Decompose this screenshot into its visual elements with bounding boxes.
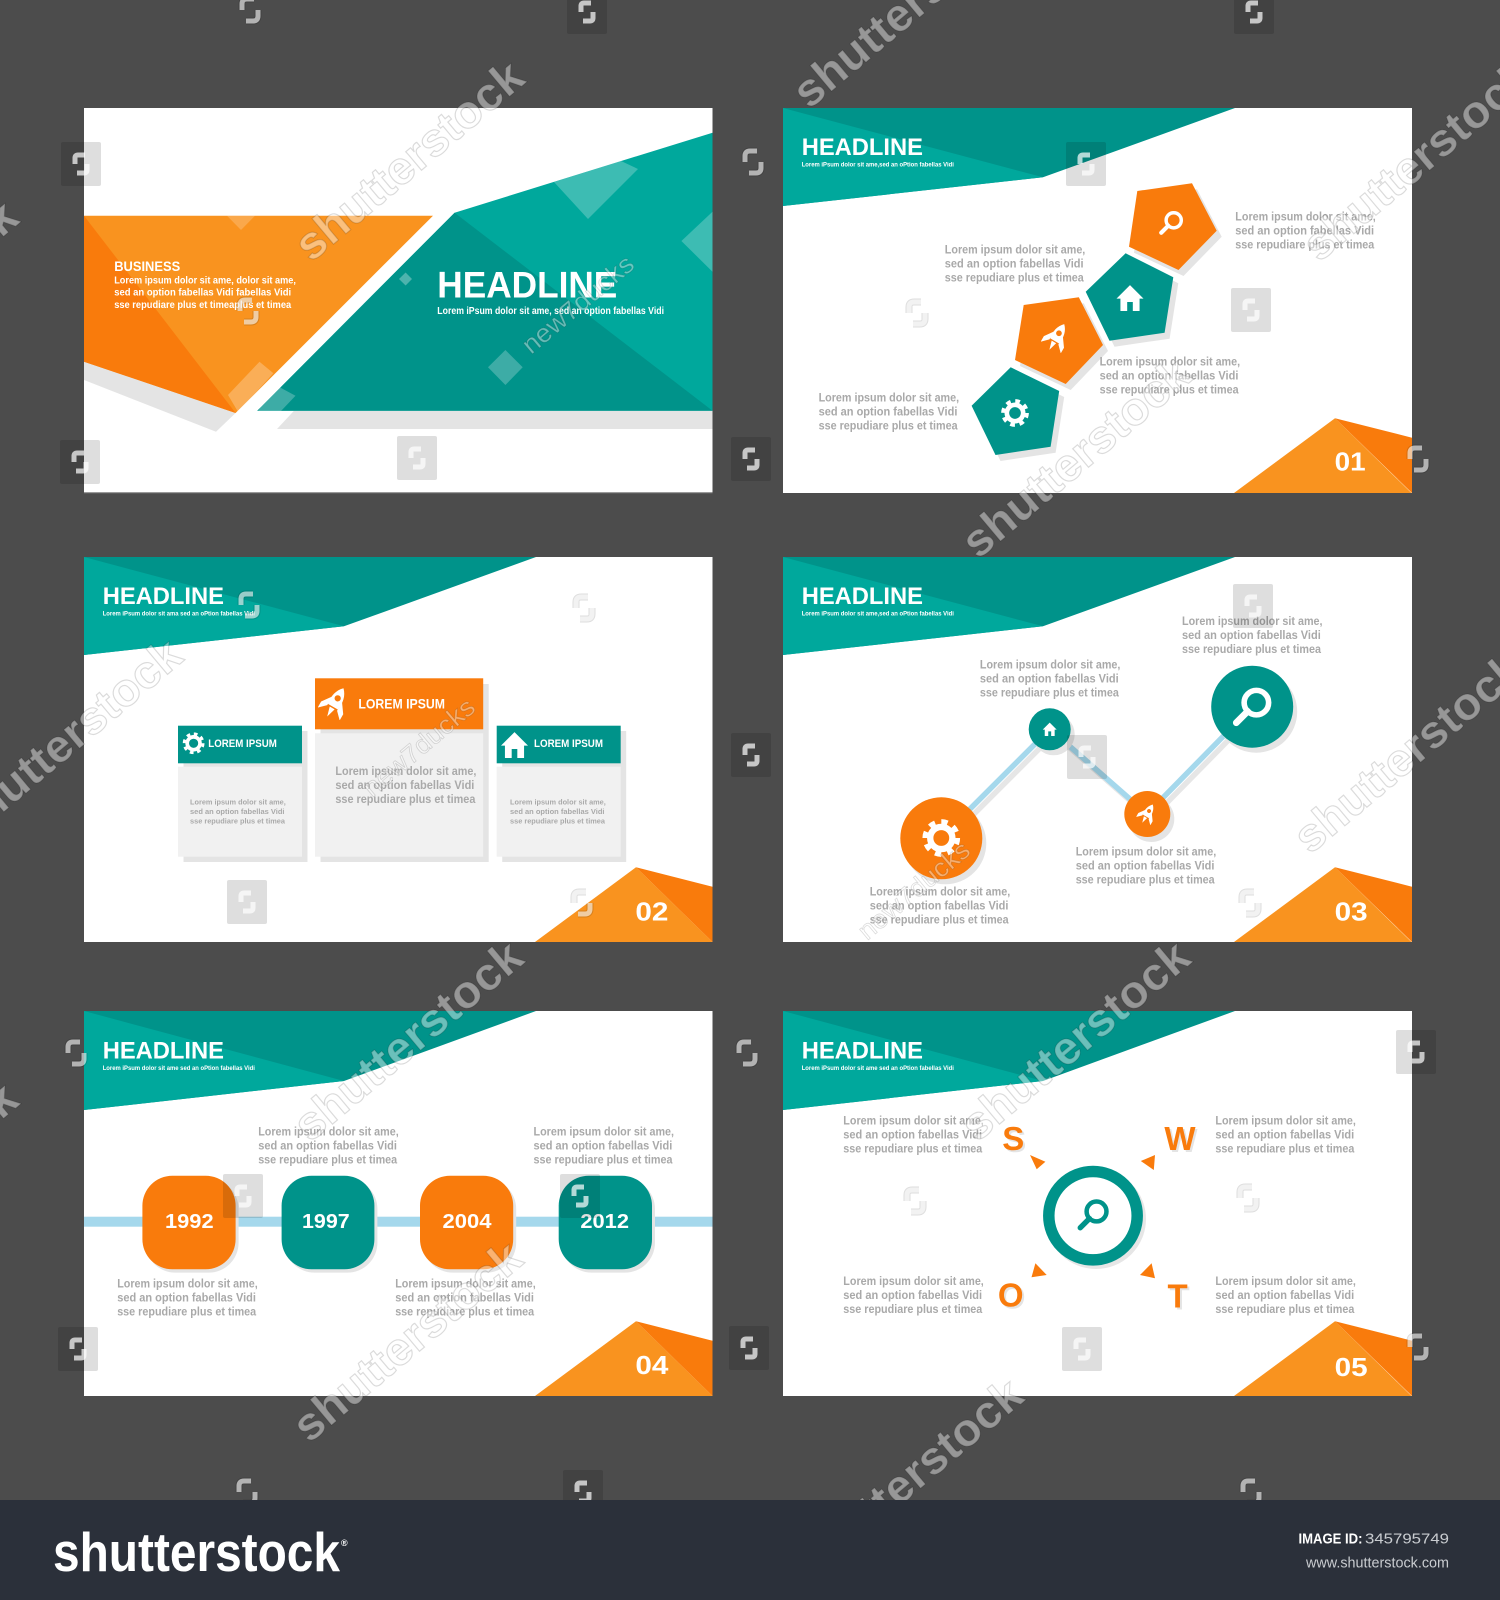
text block: 1997: sse repudiare plus et timea bbox=[258, 1155, 398, 1167]
watermark words: shutterstock bbox=[950, 929, 1200, 1151]
card: home: sse repudiare plus et timea bbox=[510, 817, 606, 826]
page number corner 02 bbox=[535, 867, 712, 942]
letter W: W bbox=[1164, 1120, 1196, 1157]
year 2004 bbox=[420, 1176, 513, 1269]
card: home: sed an option fabellas Vidi bbox=[510, 807, 604, 816]
orange banner shadow bbox=[84, 362, 236, 432]
text block: 2012: sse repudiare plus et timea bbox=[534, 1155, 673, 1167]
watermark words: shutterstock bbox=[951, 346, 1201, 568]
slide bottom edge bbox=[84, 492, 712, 493]
teal banner bbox=[257, 133, 712, 411]
slide background bbox=[783, 108, 1412, 493]
business text block: Lorem ipsum dolor sit ame, dolor sit ame, bbox=[114, 275, 296, 286]
text block: gear: sse repudiare plus et timea bbox=[870, 915, 1009, 927]
page number corner 01 bbox=[1234, 418, 1412, 493]
text block: lower right bbox=[1100, 356, 1240, 396]
letter S: S bbox=[1004, 1122, 1026, 1159]
year 2004: 2004 bbox=[442, 1211, 492, 1233]
card: rocket: Lorem ipsum dolor sit ame, bbox=[335, 766, 476, 778]
arrowheads bbox=[1030, 1155, 1155, 1278]
text block: threats: Lorem ipsum dolor sit ame, bbox=[1215, 1276, 1356, 1288]
text block: gear: Lorem ipsum dolor sit ame, bbox=[870, 887, 1010, 899]
header banner: Lorem iPsum dolor sit ame sed an oPtion fabellas Vidi bbox=[802, 1066, 954, 1072]
card: rocket: sed an option fabellas Vidi bbox=[335, 780, 474, 792]
header banner bbox=[783, 1011, 1235, 1110]
card: home: LOREM IPSUM bbox=[534, 738, 603, 750]
text block: weaknesses bbox=[1215, 1115, 1356, 1155]
text block: search: sed an option fabellas Vidi bbox=[1182, 630, 1321, 642]
text block: 1992: sse repudiare plus et timea bbox=[117, 1306, 257, 1318]
slide background bbox=[84, 1011, 712, 1396]
circle shadows bbox=[904, 671, 1297, 884]
timeline bar bbox=[84, 1217, 712, 1227]
text block: upper left: sse repudiare plus et timea bbox=[945, 272, 1084, 284]
text block: strengths bbox=[843, 1115, 984, 1155]
node: rocket bbox=[1124, 791, 1170, 837]
text block: lower left bbox=[819, 393, 959, 433]
text block: weaknesses: sed an option fabellas Vidi bbox=[1215, 1129, 1354, 1141]
text block: weaknesses: Lorem ipsum dolor sit ame, bbox=[1215, 1115, 1356, 1127]
pentagon: gear bbox=[972, 367, 1059, 455]
header banner: Lorem iPsum dolor sit ame,sed an oPtion fabellas Vidi bbox=[802, 612, 954, 618]
year 1992 bbox=[142, 1176, 236, 1269]
text block: search: Lorem ipsum dolor sit ame, bbox=[1182, 616, 1322, 628]
watermark words: shutterstock bbox=[283, 929, 533, 1151]
header banner: HEADLINE bbox=[103, 583, 224, 610]
text block: threats: sse repudiare plus et timea bbox=[1215, 1304, 1355, 1316]
text block: upper left: sed an option fabellas Vidi bbox=[945, 258, 1084, 270]
text block: search: sse repudiare plus et timea bbox=[1182, 644, 1322, 656]
header banner bbox=[84, 1011, 536, 1110]
text block: upper right bbox=[1235, 212, 1376, 252]
page number corner 01: 01 bbox=[1335, 447, 1366, 477]
pentagon: rocket bbox=[1015, 297, 1103, 384]
footer logo: ® bbox=[341, 1538, 348, 1548]
year 2012: 2012 bbox=[580, 1211, 629, 1233]
connecting line shadow bbox=[945, 712, 1256, 843]
node: home bbox=[1029, 708, 1071, 750]
slide background bbox=[783, 1011, 1412, 1396]
text block: rocket bbox=[1076, 847, 1216, 887]
card: rocket bbox=[315, 678, 489, 862]
letter W: W bbox=[1166, 1122, 1198, 1159]
node: search bbox=[1211, 666, 1293, 748]
card: gear: sse repudiare plus et timea bbox=[190, 817, 286, 826]
text block: 1992: Lorem ipsum dolor sit ame, bbox=[117, 1278, 258, 1290]
text block: upper right: Lorem ipsum dolor sit ame, bbox=[1235, 212, 1376, 224]
pentagon: search bbox=[1129, 183, 1217, 270]
text block: opportunities: sed an option fabellas Vidi bbox=[843, 1290, 982, 1302]
watermark words: shutterstock bbox=[284, 49, 534, 271]
text block: 2004 bbox=[395, 1278, 536, 1318]
panel: slide 04 timeline bbox=[84, 1011, 712, 1396]
connecting line bbox=[941, 707, 1252, 838]
text block: 1997: Lorem ipsum dolor sit ame, bbox=[258, 1127, 399, 1139]
pentagon shadows bbox=[977, 189, 1222, 461]
header banner: HEADLINE bbox=[802, 583, 923, 610]
text block: lower right: Lorem ipsum dolor sit ame, bbox=[1100, 356, 1240, 368]
panel: slide 02 cards bbox=[84, 557, 712, 942]
year 2012 bbox=[559, 1176, 652, 1269]
image id: 345795749 bbox=[1365, 1530, 1449, 1547]
text block: weaknesses: sse repudiare plus et timea bbox=[1215, 1143, 1355, 1155]
text block: lower left: sse repudiare plus et timea bbox=[819, 421, 958, 433]
text block: lower right: sse repudiare plus et timea bbox=[1100, 384, 1239, 396]
card: rocket: sse repudiare plus et timea bbox=[335, 794, 476, 806]
text block: rocket: Lorem ipsum dolor sit ame, bbox=[1076, 847, 1216, 859]
watermark words: shutterstock bbox=[282, 1230, 532, 1452]
image id bbox=[1298, 1530, 1449, 1547]
letter O: O bbox=[998, 1277, 1024, 1314]
text block: upper right: sed an option fabellas Vidi bbox=[1235, 226, 1374, 238]
text block: gear: sed an option fabellas Vidi bbox=[870, 901, 1008, 913]
watermark words: new7ducks bbox=[516, 249, 640, 360]
text block: strengths: sse repudiare plus et timea bbox=[843, 1143, 983, 1155]
text block: threats bbox=[1215, 1276, 1356, 1316]
header banner: HEADLINE bbox=[103, 1037, 224, 1064]
text block: strengths: Lorem ipsum dolor sit ame, bbox=[843, 1115, 984, 1127]
slide background bbox=[783, 557, 1412, 942]
footer logo: shutterstock bbox=[53, 1521, 340, 1583]
header banner: HEADLINE bbox=[802, 134, 923, 161]
text block: 1992 bbox=[117, 1278, 258, 1318]
cover headline: Lorem iPsum dolor sit ame, sed an option fabellas Vidi bbox=[437, 306, 664, 317]
business text block: BUSINESS bbox=[114, 258, 180, 274]
text block: opportunities: Lorem ipsum dolor sit ame, bbox=[843, 1276, 984, 1288]
text block: threats: sed an option fabellas Vidi bbox=[1215, 1290, 1354, 1302]
text block: 2012 bbox=[534, 1127, 674, 1167]
header banner: Lorem iPsum dolor sit ama sed an oPtion fabellas Vidi bbox=[103, 612, 255, 618]
year 1997: 1997 bbox=[302, 1211, 350, 1233]
header banner: HEADLINE bbox=[802, 1037, 923, 1064]
pentagon: home bbox=[1086, 253, 1173, 341]
letter T: T bbox=[1170, 1279, 1190, 1316]
text block: upper left: Lorem ipsum dolor sit ame, bbox=[945, 244, 1085, 256]
card: gear: LOREM IPSUM bbox=[208, 738, 277, 750]
text block: home: sse repudiare plus et timea bbox=[980, 687, 1119, 699]
header banner bbox=[783, 108, 1235, 206]
page number corner 04 bbox=[535, 1321, 712, 1396]
page number corner 05 bbox=[1234, 1321, 1412, 1396]
watermark words: shutterstock bbox=[783, 1367, 1033, 1589]
text block: 2004: Lorem ipsum dolor sit ame, bbox=[395, 1278, 536, 1290]
text block: lower right: sed an option fabellas Vidi bbox=[1100, 370, 1238, 382]
card: gear: Lorem ipsum dolor sit ame, bbox=[190, 797, 286, 806]
teal banner shadow bbox=[277, 411, 712, 429]
letter O: O bbox=[1000, 1279, 1026, 1316]
card: gear bbox=[178, 726, 308, 862]
watermark words: new7ducks bbox=[852, 835, 976, 946]
text block: 2004: sed an option fabellas Vidi bbox=[395, 1292, 534, 1304]
business text block bbox=[114, 258, 296, 311]
panel: slide 01 pentagons bbox=[783, 108, 1412, 493]
text block: opportunities: sse repudiare plus et timea bbox=[843, 1304, 983, 1316]
image id: IMAGE ID: bbox=[1298, 1530, 1362, 1547]
page number corner 03: 03 bbox=[1335, 897, 1368, 927]
text block: lower left: sed an option fabellas Vidi bbox=[819, 407, 957, 419]
cover headline: HEADLINE bbox=[437, 265, 617, 306]
card: gear: sed an option fabellas Vidi bbox=[190, 807, 284, 816]
business text block: sed an option fabellas Vidi fabellas Vidi bbox=[114, 288, 291, 299]
text block: upper right: sse repudiare plus et timea bbox=[1235, 240, 1375, 252]
cover headline bbox=[437, 265, 664, 317]
text block: lower left: Lorem ipsum dolor sit ame, bbox=[819, 393, 959, 405]
letter T: T bbox=[1168, 1277, 1188, 1314]
panel: slide 03 path bbox=[783, 557, 1412, 942]
year 1992: 1992 bbox=[165, 1211, 214, 1233]
text block: strengths: sed an option fabellas Vidi bbox=[843, 1129, 982, 1141]
orange banner bbox=[84, 216, 433, 413]
text block: 2012: sed an option fabellas Vidi bbox=[534, 1141, 672, 1153]
text block: home bbox=[980, 659, 1120, 699]
panel: slide 05 SWOT bbox=[783, 1011, 1412, 1396]
text block: 2012: Lorem ipsum dolor sit ame, bbox=[534, 1127, 674, 1139]
text block: home: Lorem ipsum dolor sit ame, bbox=[980, 659, 1120, 671]
year 1997 bbox=[282, 1176, 374, 1269]
page number corner 05: 05 bbox=[1335, 1352, 1368, 1382]
page number corner 03 bbox=[1234, 867, 1412, 942]
letter S: S bbox=[1002, 1120, 1024, 1157]
page number corner 04: 04 bbox=[635, 1350, 669, 1380]
text block: 1992: sed an option fabellas Vidi bbox=[117, 1292, 256, 1304]
text block: search bbox=[1182, 616, 1322, 656]
year shadows bbox=[145, 1179, 655, 1273]
text block: gear bbox=[870, 887, 1010, 927]
card: rocket: LOREM IPSUM bbox=[358, 696, 445, 712]
node: gear bbox=[900, 797, 982, 879]
page number corner 02: 02 bbox=[635, 897, 668, 927]
header banner: Lorem iPsum dolor sit ame,sed an oPtion fabellas Vidi bbox=[802, 163, 954, 169]
card: home bbox=[497, 726, 626, 862]
slide background bbox=[84, 557, 712, 942]
watermark words: new7ducks bbox=[357, 692, 481, 803]
business text block: sse repudiare plus et timeaplus et timea bbox=[114, 300, 292, 311]
text block: home: sed an option fabellas Vidi bbox=[980, 673, 1119, 685]
central ring with search icon bbox=[1049, 1172, 1140, 1263]
text block: 1997: sed an option fabellas Vidi bbox=[258, 1141, 397, 1153]
header banner: Lorem iPsum dolor sit ame sed an oPtion fabellas Vidi bbox=[103, 1066, 255, 1072]
text block: 1997 bbox=[258, 1127, 399, 1167]
text block: rocket: sed an option fabellas Vidi bbox=[1076, 861, 1214, 873]
header banner bbox=[84, 557, 536, 655]
text block: 2004: sse repudiare plus et timea bbox=[395, 1306, 535, 1318]
site url: www.shutterstock.com bbox=[1305, 1555, 1449, 1572]
footer bar bbox=[0, 1500, 1500, 1600]
text block: rocket: sse repudiare plus et timea bbox=[1076, 875, 1215, 887]
header banner bbox=[783, 557, 1235, 655]
text block: opportunities bbox=[843, 1276, 984, 1316]
slide background bbox=[84, 108, 712, 493]
panel: cover slide bbox=[84, 108, 712, 493]
card: home: Lorem ipsum dolor sit ame, bbox=[510, 797, 606, 806]
text block: upper left bbox=[945, 244, 1085, 284]
